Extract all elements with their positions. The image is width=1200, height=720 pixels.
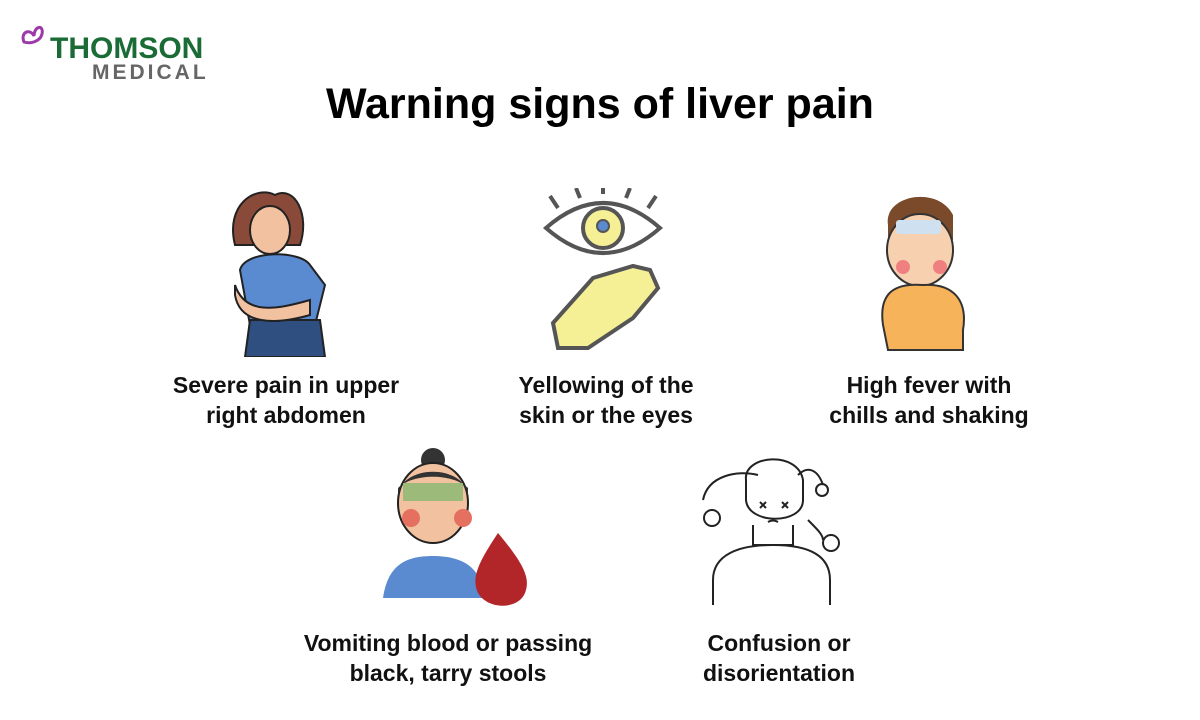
label: vomiting: black, tarry stools <box>350 660 546 686</box>
label: vomiting <box>304 630 592 686</box>
title: Warning signs of liver pain <box>326 80 874 128</box>
logo: MEDICAL <box>92 61 209 84</box>
label: confusion: Confusion or <box>707 630 851 656</box>
label: pain <box>173 372 399 428</box>
icon: boy with fever <box>881 196 965 351</box>
label: fever <box>829 372 1029 428</box>
icon: confused person <box>702 458 840 605</box>
icon: eye and hand <box>543 188 663 350</box>
label: fever: chills and shaking <box>829 402 1029 428</box>
label: confusion <box>703 630 855 686</box>
label: fever: High fever with <box>847 372 1011 398</box>
label: pain: right abdomen <box>206 402 366 428</box>
icon: butterfly <box>22 26 44 44</box>
icon: woman with abdominal pain <box>232 191 326 357</box>
label: yellowing: Yellowing of the <box>518 372 694 398</box>
icon: woman vomiting with blood drop <box>383 448 527 606</box>
logo text: THOMSON <box>50 32 203 65</box>
label: vomiting: Vomiting blood or passing <box>304 630 592 656</box>
label: confusion: disorientation <box>703 660 855 686</box>
label: yellowing: skin or the eyes <box>519 402 693 428</box>
logo <box>22 26 209 84</box>
label: yellowing <box>518 372 694 428</box>
label: pain: Severe pain in upper <box>173 372 399 398</box>
